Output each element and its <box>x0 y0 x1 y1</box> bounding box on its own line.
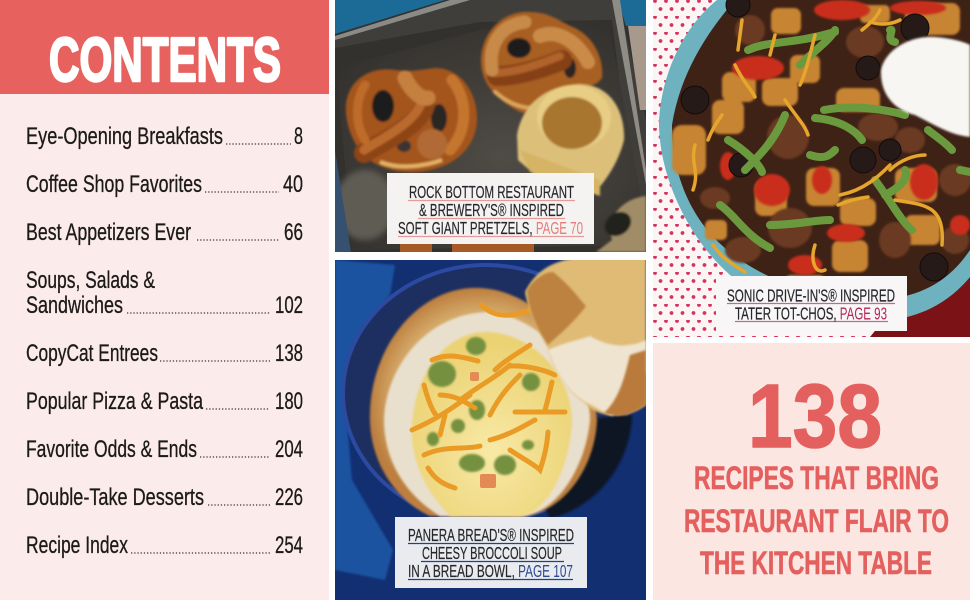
entry: coffee shop: Coffee Shop Favorites <box>26 171 202 198</box>
entry: coffee shop: 40 <box>283 171 303 198</box>
entry: appetizers: Best Appetizers Ever <box>26 219 191 246</box>
lettuce and cheese shreds <box>693 10 970 272</box>
caption: pretzels: ROCK BOTTOM RESTAURANT <box>409 182 574 202</box>
mustard jar <box>517 84 624 196</box>
spoon <box>596 196 646 252</box>
bread lid <box>525 258 646 415</box>
entry: pizza: 180 <box>275 388 303 415</box>
caption: soup: PANERA BREAD'S® INSPIRED <box>408 525 574 545</box>
carrot bits <box>470 372 496 488</box>
entry: breakfasts: Eye-Opening Breakfasts <box>26 123 223 150</box>
black olives <box>681 0 948 281</box>
entry: index: 254 <box>275 532 303 559</box>
lid crust right <box>604 350 646 416</box>
entry: entrees: CopyCat Entrees <box>26 340 158 367</box>
dark red table corner <box>870 277 970 337</box>
photo: broccoli soup <box>335 258 646 600</box>
tater tots <box>672 3 960 293</box>
cloth at right <box>628 26 646 110</box>
entry: desserts: Double-Take Desserts <box>26 484 204 511</box>
tray worn patches <box>340 168 387 242</box>
cheddar shreds <box>412 302 565 488</box>
right pretzel holes <box>507 38 531 58</box>
tray rim <box>335 0 646 252</box>
sour cream <box>881 37 970 137</box>
caption: pretzels: & BREWERY'S® INSPIRED <box>419 200 564 220</box>
tray edge left <box>335 150 351 252</box>
polka tablecloth <box>653 0 874 337</box>
right pretzel strands <box>491 22 588 108</box>
blue wood table <box>335 0 445 34</box>
entry: desserts: 226 <box>275 484 303 511</box>
teal bowl <box>659 0 970 322</box>
photo: tater tot-chos <box>653 0 970 337</box>
right pretzel <box>481 12 602 114</box>
lower pretzels <box>400 244 534 252</box>
entry: entrees: 138 <box>275 340 303 367</box>
entry: index: Recipe Index <box>26 532 128 559</box>
panel: recipe count <box>653 343 970 600</box>
entry: entrees <box>26 340 303 367</box>
bowl food base <box>672 0 970 300</box>
entry: breakfasts: 8 <box>294 123 303 150</box>
bread crumb rim <box>384 312 590 516</box>
entry: pizza: Popular Pizza & Pasta <box>26 388 203 415</box>
entry: appetizers: 66 <box>284 219 303 246</box>
photo: pretzels <box>335 0 646 252</box>
red sauce <box>720 0 970 275</box>
left pretzel strands <box>358 78 464 153</box>
caption: pretzels <box>387 173 594 244</box>
left pretzel holes <box>372 90 394 122</box>
plate <box>341 263 631 523</box>
big number 138: 138 <box>748 367 882 467</box>
tagline <box>684 460 949 581</box>
entry: soups <box>26 267 303 319</box>
lid crust face <box>527 272 586 345</box>
heading: contents: CONTENTS <box>49 26 281 95</box>
entry: soups: Sandwiches <box>26 292 123 319</box>
tray surface <box>358 49 633 248</box>
contents header band <box>0 0 329 94</box>
entry: index <box>26 532 303 559</box>
entry: odds and ends: 204 <box>275 436 303 463</box>
entry: soups: 102 <box>275 292 303 319</box>
plate dark at right <box>544 414 634 517</box>
ground beef <box>700 15 970 263</box>
left pretzel <box>346 68 477 172</box>
caption: tater tot-chos <box>716 276 907 331</box>
caption: pretzels: SOFT GIANT PRETZELS, PAGE 70 <box>398 218 583 238</box>
soup <box>412 332 572 516</box>
contents background <box>0 94 329 600</box>
broccoli <box>427 337 540 475</box>
panel: contents <box>0 0 329 600</box>
blue napkin <box>335 260 395 580</box>
entry: odds and ends: Favorite Odds & Ends <box>26 436 197 463</box>
caption: tater tot-chos: TATER TOT-CHOS, PAGE 93 <box>735 304 887 324</box>
lid crumb <box>548 336 646 416</box>
bread bowl <box>370 258 646 517</box>
caption: soup: CHEESY BROCCOLI SOUP <box>422 543 562 563</box>
caption: soup <box>395 517 587 588</box>
recipe panel background <box>653 343 970 600</box>
entry: soups: Soups, Salads & <box>26 267 155 294</box>
caption: soup: IN A BREAD BOWL, PAGE 107 <box>408 561 573 581</box>
